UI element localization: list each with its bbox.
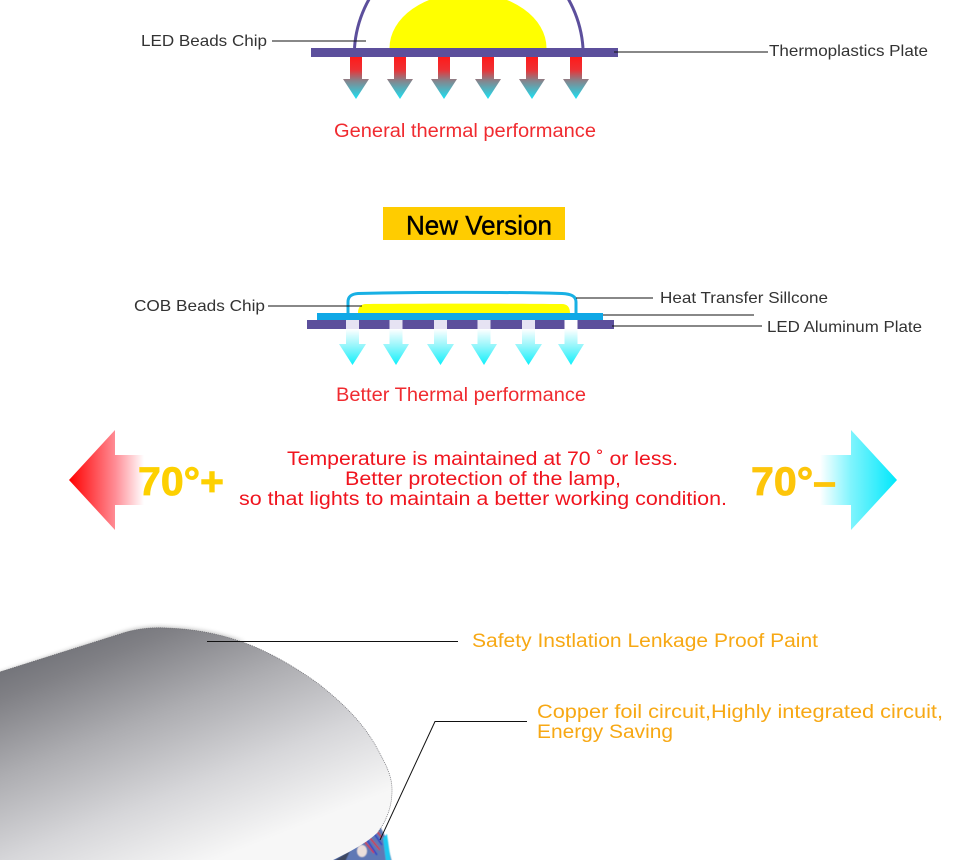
arrow: cyan right: [820, 430, 897, 530]
arrow: red left: [69, 430, 144, 530]
thermoplastics plate: [311, 48, 618, 57]
icon: circuit layer: [332, 826, 392, 860]
label: Thermoplastics Plate: Thermoplastics Plate: [769, 43, 928, 60]
label: 70 degrees minus: 70°–: [751, 460, 836, 504]
LED aluminum plate: [307, 320, 614, 329]
leader line: copper circuit: [380, 722, 527, 840]
label: copper foil circuit: [537, 702, 943, 743]
label: Heat Transfer Sillcone: Heat Transfer Sillcone: [660, 290, 828, 307]
label: 70 degrees plus: 70°+: [138, 460, 224, 504]
icon: yellow LED chip: [390, 0, 546, 48]
icon: COB yellow chip: [358, 304, 570, 313]
heat arrows: red to cyan: [343, 57, 589, 99]
shell dotted edge: [0, 628, 392, 832]
text: temperature statement: Better protection of the lamp,: [345, 469, 621, 490]
caption: general thermal performance: General thermal performance: [334, 121, 596, 142]
icon: LED dome: [354, 0, 583, 48]
label: COB Beads Chip: COB Beads Chip: [134, 298, 265, 315]
blue plate: [317, 313, 603, 320]
plate thermal windows: [346, 320, 578, 329]
label: copper foil circuit: Energy Saving: [537, 722, 673, 743]
panel: new version thermal diagram: [134, 290, 922, 406]
leader line: paint: [207, 640, 458, 642]
text: temperature statement: Temperature is maintained at 70 ˚ or less.: [287, 449, 678, 470]
text: temperature statement: so that lights to maintain a better working condition.: [239, 489, 727, 510]
leader line: blue plate: [603, 314, 754, 316]
panel: lamp bead cross-section: [0, 627, 943, 860]
icon: heat transfer silicone cover: [348, 292, 576, 313]
heading: New Version: New Version: [406, 210, 552, 240]
text: temperature statement: [239, 449, 727, 510]
label: copper foil circuit: Copper foil circuit,Highly integrated circuit,: [537, 702, 943, 723]
shell shadow: [0, 627, 245, 700]
label: LED Aluminum Plate: LED Aluminum Plate: [767, 319, 922, 336]
heat arrows: white to cyan: [339, 329, 584, 365]
caption: better thermal performance: Better Thermal performance: [336, 385, 586, 406]
label: safety paint: Safety Instlation Lenkage Proof Paint: [472, 631, 819, 652]
label: LED Beads Chip: LED Beads Chip: [141, 33, 267, 50]
panel: temperature comparison: [69, 430, 897, 530]
icon: gray shell: [0, 628, 392, 860]
panel: old version thermal diagram: [141, 0, 928, 142]
